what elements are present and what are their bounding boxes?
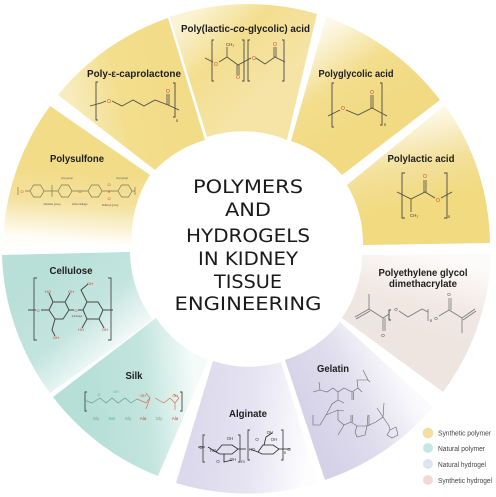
legend item: natural hydrogel: Natural hydrogel [438,462,486,469]
molecule: HO [78,327,84,332]
molecule: Aliphatic group [43,202,61,206]
panel: silk [53,318,208,476]
molecule: β-linkage [72,314,83,318]
molecule: n [430,318,433,323]
molecule: OH [172,394,178,398]
molecule: O [216,459,220,464]
molecule: n [284,450,287,455]
title: TISSUE [213,271,282,293]
molecule [18,176,135,207]
molecule: Ser [108,416,116,421]
title: AND [225,199,271,221]
panel: poly-ε-caprolactone [58,18,205,170]
molecule: Ether linkage [72,202,88,206]
molecule: O [98,393,101,397]
title: IN KIDNEY [198,248,298,270]
molecule: Gly [156,416,163,421]
panel: polylactic acid [347,105,490,245]
molecule [397,173,452,219]
molecule: OH [53,335,59,340]
panel: polyglycolic acid [291,17,440,175]
molecule [198,430,291,464]
molecule: O [381,333,385,338]
molecule: O [107,182,111,187]
panel: polyethylene glycol dimethacrylate [342,254,491,392]
molecule: n [176,118,179,123]
molecule: O [214,62,218,68]
title: HYDROGELS [186,225,310,247]
molecule: O [74,308,78,313]
molecule: O [236,75,240,81]
molecule [328,83,387,127]
molecule: O [394,307,398,312]
legend item: natural polymer: Natural polymer [438,446,486,453]
molecule: O [36,308,40,313]
molecule [313,370,398,438]
molecule: n [448,214,451,219]
molecule: O [434,316,438,321]
molecule: Aryl group [61,176,73,180]
molecule: HO [210,448,217,453]
heading: Poly-ε-caprolactone [87,68,181,80]
legend item: synthetic hydrogel: Synthetic hydrogel [438,478,492,485]
molecule [355,292,476,338]
heading: Polysulfone [50,153,104,165]
panel: poly(lactic-co-glycolic) acid [170,4,317,140]
molecule: OH [68,289,74,294]
molecule: OH [230,457,236,462]
molecule: OH [267,430,273,435]
panel: polysulfone [3,106,150,245]
title: POLYMERS [193,176,303,198]
legend [423,428,492,485]
molecule: Aryl group [116,176,128,180]
molecule: O [107,196,111,201]
molecule: OH [227,436,233,441]
panel: gelatin [285,322,433,480]
panel: alginate [176,361,318,494]
molecule: OH [271,437,277,442]
heading: Polyglycolic acid [318,68,394,80]
legend item: synthetic polymer: Synthetic polymer [438,430,492,438]
molecule: OH [87,281,93,286]
molecule: OH [102,327,108,332]
title: ENGINEERING [174,293,322,315]
molecule: O [199,445,203,450]
molecule [205,40,285,81]
molecule: OH [140,394,146,398]
molecule: O [447,292,451,297]
molecule: HO [45,289,51,294]
molecule: Ala [140,416,147,421]
molecule: O [255,437,259,442]
molecule: Gly [93,416,100,421]
heading: Poly(lactic-co-glycolic) acid [181,23,310,35]
molecule: O [341,106,345,112]
molecule: OH [113,390,119,394]
molecule: Ala [172,416,179,421]
molecule: S [108,189,111,194]
heading: Silk [126,370,143,382]
molecule: O [273,42,277,48]
molecule: HO [249,447,256,452]
heading: Gelatin [317,363,349,375]
heading: Polyethylene glycol [378,267,468,279]
molecule [28,278,113,340]
molecule: O [166,89,170,95]
molecule: O [436,198,440,204]
molecule [90,82,179,123]
title [174,176,322,315]
molecule: O [423,174,427,180]
molecule: O [20,189,24,194]
molecule: n [384,122,387,127]
heading: Cellulose [50,265,93,277]
heading [378,267,468,290]
molecule: O [107,99,111,105]
molecule: O [370,90,374,96]
molecule: Sulfonyl group [102,203,119,207]
molecule: CH₃ [226,42,234,47]
heading: Alginate [229,408,267,420]
molecule: Gly [125,416,132,421]
molecule: m [241,459,245,464]
molecule [84,390,182,421]
heading: dimethacrylate [389,278,457,290]
molecule: O [78,189,82,194]
molecule: O [287,447,291,452]
molecule: O [252,56,256,62]
molecule: CH₃ [410,213,418,218]
heading: Polylactic acid [388,153,454,165]
panel: cellulose [2,252,153,393]
